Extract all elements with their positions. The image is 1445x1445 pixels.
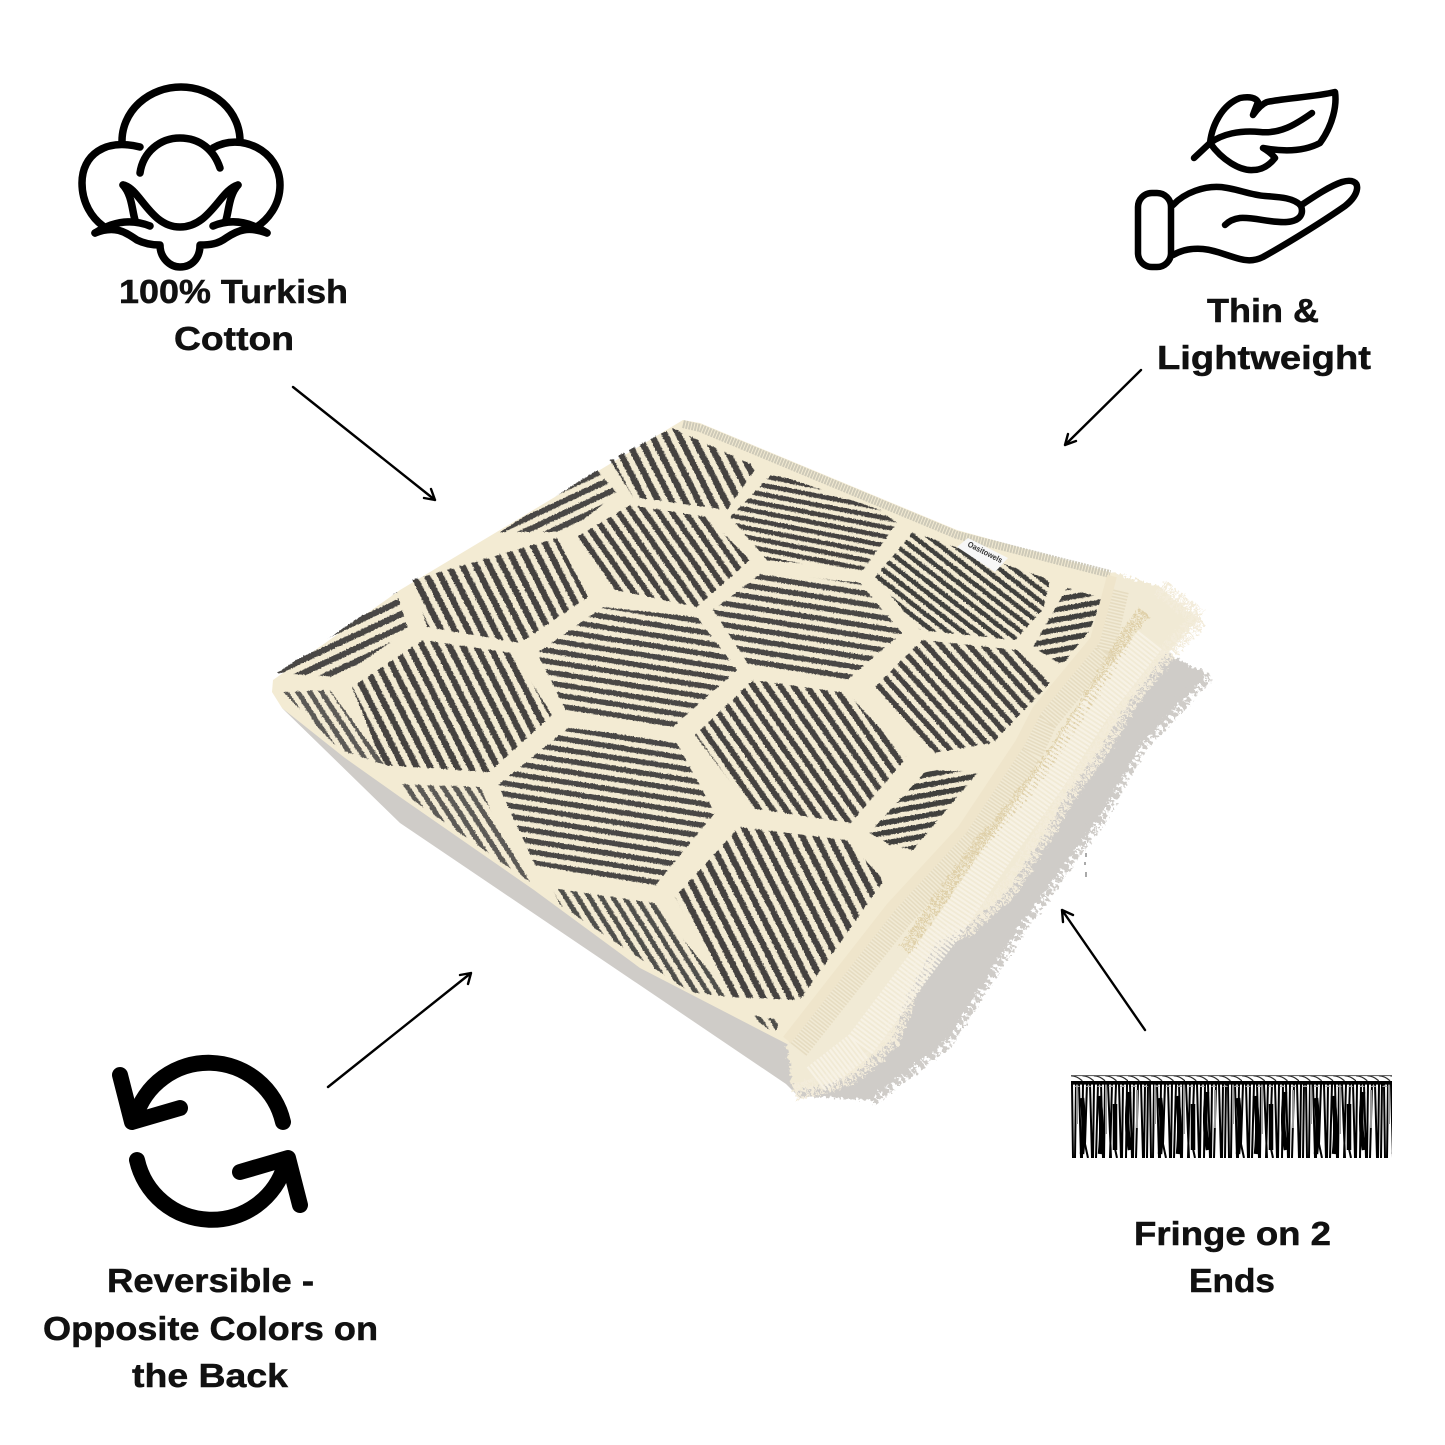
towel shadow (282, 650, 1207, 1100)
arrow: cotton to towel (293, 387, 435, 500)
icon: fringe swatch (1071, 1075, 1392, 1158)
label: Thin & Lightweight: Lightweight (1157, 339, 1371, 376)
towel hexagon stripes (277, 428, 1102, 1034)
icon: reverse arrows (120, 1063, 300, 1220)
speck near fringe (1085, 853, 1086, 877)
label: Reversible (43, 1262, 378, 1394)
label: Thin & Lightweight: Thin & (1207, 292, 1319, 329)
towel tag: Oasitowels (966, 540, 1004, 565)
label: Fringe on 2 Ends (1134, 1215, 1331, 1299)
towel top edge (683, 424, 1110, 574)
label: Reversible: Reversible - (107, 1262, 314, 1299)
label: Fringe on 2 Ends: Ends (1189, 1262, 1275, 1299)
label: 100% Turkish Cotton: Cotton (174, 320, 294, 357)
label: Thin & Lightweight (1157, 292, 1371, 376)
label: Reversible: the Back (132, 1357, 289, 1394)
arrow: fringe to towel (1062, 910, 1145, 1030)
towel tag (957, 538, 1008, 572)
icon: leaf over hand (1138, 92, 1357, 267)
label: Fringe on 2 Ends: Fringe on 2 (1134, 1215, 1331, 1252)
icon: cotton boll (82, 87, 280, 267)
label: 100% Turkish Cotton: 100% Turkish (119, 273, 348, 310)
towel photo (272, 420, 1207, 1100)
label: Reversible: Opposite Colors on (43, 1310, 378, 1347)
label: 100% Turkish Cotton (119, 273, 348, 357)
arrow: lightweight to towel (1065, 370, 1141, 445)
towel hem (787, 576, 1112, 1040)
towel fringe (786, 572, 1200, 1092)
arrow: reversible to towel (328, 973, 471, 1087)
towel body (272, 420, 1116, 1044)
